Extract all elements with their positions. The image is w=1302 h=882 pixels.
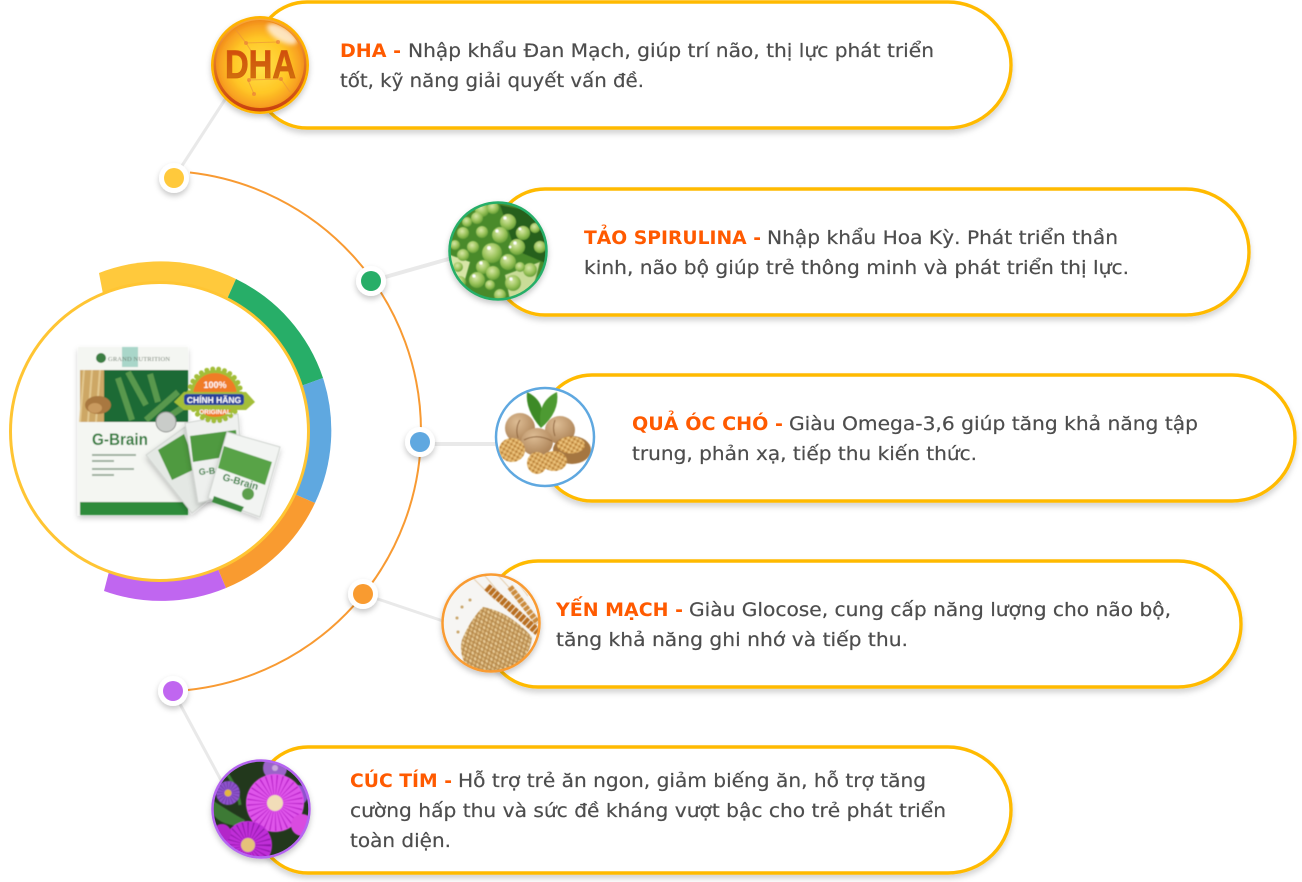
node: green [356,266,386,296]
text: DHA: Nhập khẩu Đan Mạch, giúp trí não, thị lực phát triển [408,40,934,62]
icon: oat grains [442,570,540,673]
text: DHA [340,40,934,92]
product box: G-Brain [92,430,148,449]
text: oat: tăng khả năng ghi nhớ và tiếp thu. [556,629,908,651]
product box: GRAND NUTRITION [108,356,170,363]
text: spirulina [584,224,1129,279]
node: blue [405,427,435,457]
pill [487,561,1241,687]
product hub [10,261,331,601]
badge: 100% chinh hang [174,369,255,421]
product box [78,347,188,515]
icon: purple aster flowers [212,756,313,869]
text: spirulina: Nhập khẩu Hoa Kỳ. Phát triển thần [767,227,1118,249]
icon: spirulina beads [449,202,550,301]
panel: walnut [496,375,1295,501]
connector: walnut [420,442,500,446]
badge: 100% chinh hang: ORIGINAL [199,409,231,416]
panel: oat [442,561,1241,687]
pill [541,375,1295,501]
pill [256,2,1011,128]
text: walnut: QUẢ ÓC CHÓ - [632,410,783,435]
node: yellow [159,163,189,193]
text: walnut [632,410,1198,465]
panel: spirulina [449,189,1249,315]
text: spirulina: TẢO SPIRULINA - [584,224,761,249]
large orange connecting arc [188,172,421,690]
text: spirulina: kinh, não bộ giúp trẻ thông minh và phát triển thị lực. [584,257,1129,279]
node: purple [158,676,188,706]
panel: DHA [211,2,1011,128]
text: oat: YẾN MẠCH - [555,595,683,621]
text: oat: Giàu Glocose, cung cấp năng lượng cho não bộ, [689,599,1171,621]
text: DHA: DHA - [340,41,401,62]
panel: aster [212,747,1011,873]
sachets: G-Br [198,465,220,477]
text: aster [350,768,946,852]
connector: DHA [174,98,226,178]
segmented colour ring [99,261,331,601]
badge: 100% chinh hang: CHÍNH HÃNG [187,395,242,405]
text: oat [555,595,1171,651]
icon: DHA capsule: DHA [225,43,296,87]
pill [494,189,1249,315]
text: aster: toàn diện. [350,831,451,852]
text: aster: CÚC TÍM - [350,768,452,792]
yellow inner circle [10,282,308,580]
connector: oat [363,594,446,622]
product image [78,347,280,517]
sachets [146,414,280,517]
badge: 100% chinh hang: 100% [203,380,227,390]
icon: DHA capsule [211,16,309,114]
text: aster: cường hấp thu và sức đề kháng vượt bậc cho trẻ phát triển [350,800,946,822]
connector: aster [173,691,222,782]
icon: walnuts [496,388,594,486]
node: orange [348,579,378,609]
sachets: G-Brain [221,472,259,493]
connector: spirulina [371,258,452,281]
text: walnut: trung, phản xạ, tiếp thu kiến thức. [632,443,977,465]
pill [257,747,1011,873]
text: aster: Hỗ trợ trẻ ăn ngon, giảm biếng ăn, hỗ trợ tăng [458,769,926,792]
text: walnut: Giàu Omega-3,6 giúp tăng khả năng tập [789,414,1198,435]
text: DHA: tốt, kỹ năng giải quyết vấn đề. [340,70,644,92]
